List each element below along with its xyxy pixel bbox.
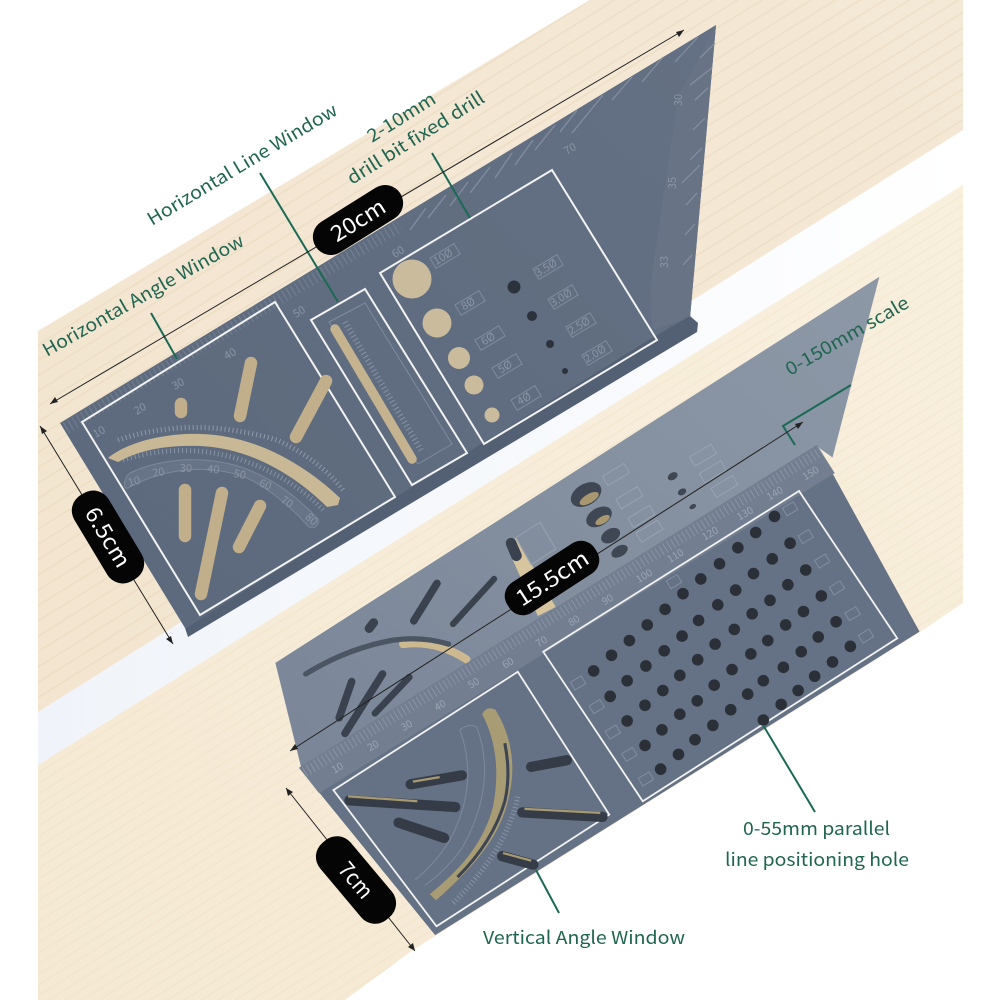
lower tool: vertical square	[275, 277, 920, 935]
protractor numbers	[126, 460, 322, 529]
size label text: 8Ø	[458, 293, 478, 314]
label: line positioning hole: line positioning hole	[725, 846, 909, 872]
curved slot shadow	[458, 743, 508, 877]
leader: drill bit	[432, 153, 470, 218]
front plate scale numbers	[328, 461, 822, 776]
dimension arrow: 6.5cm	[40, 426, 173, 644]
leader: scale	[783, 385, 851, 445]
angle slots	[181, 363, 326, 594]
protractor numbers: 50	[232, 465, 247, 483]
label: Vertical Angle Window: Vertical Angle Window	[483, 924, 685, 950]
label: 0-150mm scale: 0-150mm scale	[780, 289, 913, 381]
front plate scale numbers: 10	[328, 758, 346, 776]
front plate edge ticks	[305, 451, 821, 772]
protractor numbers: 80	[302, 509, 322, 529]
protractor band	[124, 460, 318, 528]
upper tool: horizontal square	[60, 25, 716, 637]
front plate	[299, 445, 920, 935]
protractor ticks	[452, 797, 518, 904]
pill: 15.5cm	[499, 535, 605, 621]
edge numbers: 30	[670, 94, 686, 106]
edge numbers: 50	[290, 302, 308, 322]
hole number tags	[570, 502, 874, 786]
front plate scale numbers: 90	[598, 589, 616, 608]
panel: parallel line positioning holes	[543, 491, 897, 801]
lower wood plank	[38, 185, 963, 1000]
upper wood plank	[38, 0, 963, 712]
edge numbers: 33	[656, 256, 672, 268]
panel: horizontal line window	[311, 289, 467, 485]
front plate scale numbers: 150	[799, 461, 822, 483]
size label text	[430, 244, 609, 409]
small holes	[508, 280, 568, 374]
back blade size labels	[603, 444, 738, 542]
protractor numbers: 40	[207, 461, 220, 478]
top edge slanted hatch	[410, 37, 715, 265]
label: 0-55mm parallel: 0-55mm parallel	[743, 815, 890, 841]
top edge scale ticks	[66, 226, 400, 428]
edge numbers	[90, 94, 686, 442]
size label text: 3.5Ø	[532, 255, 560, 280]
front plate scale strip	[299, 445, 835, 793]
label: 2-10mm: 2-10mm	[361, 85, 440, 148]
leader: horizontal angle window	[151, 313, 177, 359]
white gap between planks	[38, 130, 963, 765]
bevel facet	[650, 25, 716, 330]
line slot	[335, 329, 412, 459]
pill: 6.5cm	[65, 484, 151, 590]
protractor numbers: 10	[126, 472, 142, 490]
pill: 7cm: 7cm	[332, 854, 382, 905]
protractor numbers: 30	[180, 460, 192, 476]
back blade arc slot	[306, 639, 466, 674]
size label text: 6Ø	[478, 328, 498, 349]
front plate scale numbers: 40	[431, 695, 449, 714]
leader: parallel holes	[763, 725, 815, 812]
dimension arrow: 15.5cm	[290, 422, 803, 751]
pill: 6.5cm: 6.5cm	[78, 500, 140, 573]
label: Horizontal Angle Window: Horizontal Angle Window	[37, 227, 248, 362]
protractor band outline	[415, 725, 485, 885]
pill: 20cm	[306, 178, 410, 262]
front plate scale numbers: 80	[565, 610, 582, 629]
curved slot	[430, 708, 512, 900]
dimension arrow: 7cm	[286, 788, 415, 951]
leader: vertical angle window	[536, 870, 559, 913]
front plate scale numbers: 100	[632, 564, 655, 586]
size label text: 2.0Ø	[581, 341, 609, 366]
back blade	[275, 277, 879, 768]
front plate scale numbers: 70	[532, 631, 550, 650]
size label text: 3.0Ø	[547, 285, 575, 310]
front plate scale numbers: 130	[733, 502, 756, 523]
pill: 15.5cm: 15.5cm	[508, 541, 595, 613]
back blade line slot	[505, 522, 556, 616]
size label text: 4Ø	[514, 388, 534, 409]
panel: vertical angle window	[333, 672, 609, 926]
back blade angled slots	[339, 579, 494, 733]
arc slot	[108, 434, 340, 507]
front plate scale numbers: 110	[664, 544, 686, 566]
hole grid	[588, 511, 856, 775]
label: Horizontal Line Window: Horizontal Line Window	[142, 97, 342, 231]
back blade holes	[566, 470, 697, 560]
front plate scale numbers: 30	[397, 715, 415, 734]
angle slots	[349, 760, 603, 865]
edge numbers: 40	[221, 344, 239, 364]
edge numbers: 35	[664, 177, 680, 189]
front plate scale numbers: 20	[364, 735, 382, 754]
tool body	[60, 25, 716, 628]
wood showing through slots	[348, 777, 600, 861]
edge numbers: 10	[90, 422, 108, 442]
size label text: 5Ø	[495, 356, 515, 377]
front plate scale numbers: 140	[763, 482, 786, 503]
size labels	[430, 244, 612, 410]
pill: 7cm	[309, 829, 403, 931]
edge numbers: 30	[169, 374, 187, 394]
label: drill bit fixed drill: drill bit fixed drill	[341, 84, 489, 190]
flange	[185, 316, 698, 637]
back blade wood in holes	[578, 489, 611, 527]
large holes	[392, 260, 500, 422]
panel: horizontal angle window	[82, 302, 395, 615]
front plate scale numbers: 50	[464, 673, 482, 692]
size label text: 2.5Ø	[565, 313, 593, 338]
dimension arrow: 20cm	[50, 30, 684, 404]
size label text: 10Ø	[430, 244, 456, 269]
front plate scale numbers: 120	[698, 522, 721, 543]
edge numbers: 60	[389, 242, 407, 262]
protractor numbers: 60	[257, 475, 274, 494]
panel: drill bit holes	[380, 170, 657, 444]
edge numbers: 20	[131, 399, 149, 419]
edge numbers: 70	[561, 139, 579, 159]
leader: horizontal line window	[260, 173, 338, 302]
protractor numbers: 20	[151, 463, 166, 481]
pill: 20cm: 20cm	[324, 190, 391, 249]
front plate scale numbers: 60	[499, 653, 516, 671]
protractor numbers: 70	[278, 492, 297, 512]
